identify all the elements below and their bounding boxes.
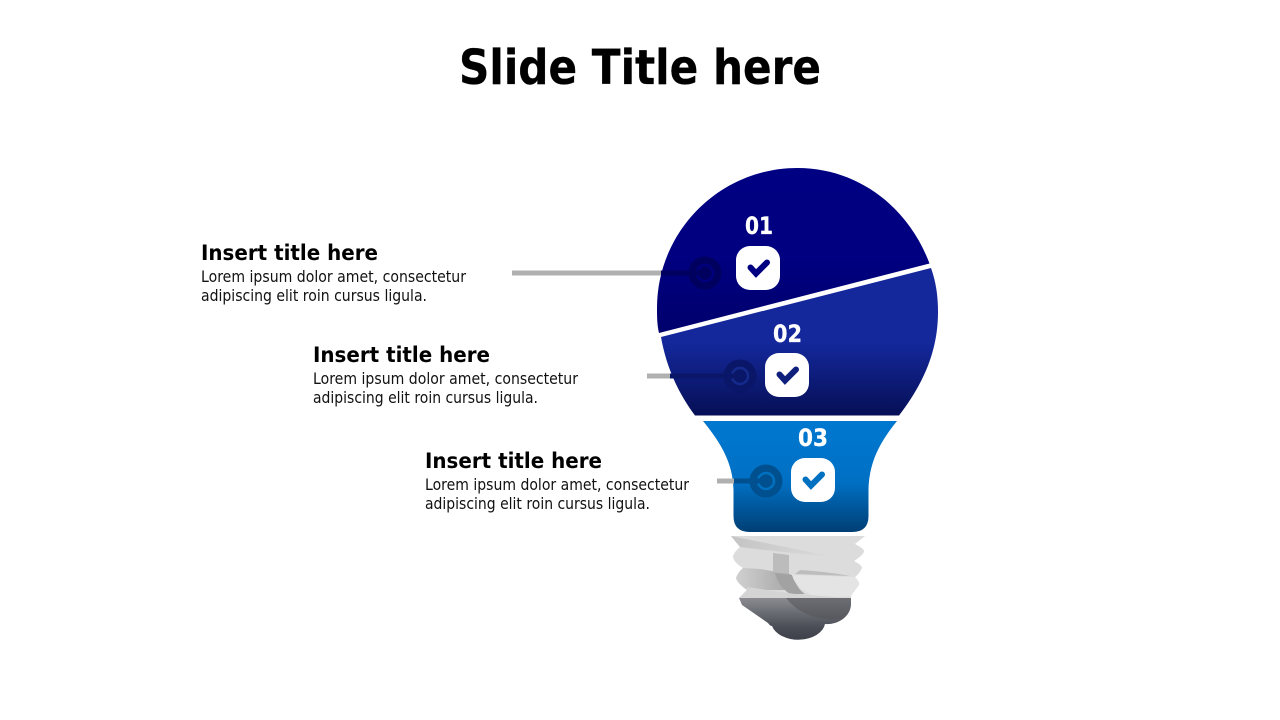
target marker 3 bbox=[750, 464, 782, 498]
bulb segment 1 bbox=[657, 168, 930, 333]
body 1: Lorem ipsum dolor amet, consectetur bbox=[201, 267, 466, 286]
bulb segment 2 bbox=[661, 268, 938, 416]
title: Slide Title here bbox=[459, 40, 821, 96]
strap curve shade bbox=[775, 573, 805, 594]
target marker 2 bbox=[724, 360, 756, 392]
body 3: adipiscing elit roin cursus ligula. bbox=[425, 494, 650, 513]
text block 2 bbox=[313, 343, 578, 407]
light bulb bbox=[657, 168, 938, 640]
base cap shade bbox=[786, 598, 851, 619]
thread shadow right bbox=[795, 570, 850, 576]
body 3: Lorem ipsum dolor amet, consectetur bbox=[425, 475, 689, 494]
thread shadow upper bbox=[731, 536, 835, 557]
number 01: 01 bbox=[745, 212, 773, 240]
heading 1: Insert title here bbox=[201, 241, 378, 265]
thread shadow middle bbox=[736, 568, 800, 590]
leader line 2 bbox=[647, 374, 670, 378]
vertical strap bbox=[773, 553, 789, 574]
lower light panel bbox=[792, 575, 859, 598]
leader line 3 bbox=[717, 478, 734, 484]
number 02: 02 bbox=[773, 320, 802, 348]
icon: check 1 bbox=[736, 246, 780, 290]
body 1: adipiscing elit roin cursus ligula. bbox=[201, 286, 427, 305]
body 2: Lorem ipsum dolor amet, consectetur bbox=[313, 369, 578, 388]
body 2: adipiscing elit roin cursus ligula. bbox=[313, 388, 538, 407]
lower thread light band bbox=[739, 587, 848, 598]
number 03: 03 bbox=[798, 424, 828, 452]
text block 3 bbox=[425, 449, 689, 513]
bulb screw base bbox=[731, 536, 865, 640]
bulb segment 3 bbox=[703, 421, 897, 532]
heading 3: Insert title here bbox=[425, 449, 602, 473]
connector 2 bbox=[647, 360, 756, 392]
heading 2: Insert title here bbox=[313, 343, 490, 367]
icon: check 3 bbox=[791, 458, 835, 502]
target marker 1 bbox=[688, 256, 722, 290]
icon: check 2 bbox=[765, 353, 809, 397]
leader line 1 bbox=[512, 270, 661, 276]
base threads silhouette bbox=[731, 536, 865, 600]
text block 1 bbox=[201, 241, 466, 305]
base cap bbox=[739, 598, 851, 640]
connector 1 bbox=[512, 256, 722, 290]
connector 3 bbox=[717, 464, 782, 498]
